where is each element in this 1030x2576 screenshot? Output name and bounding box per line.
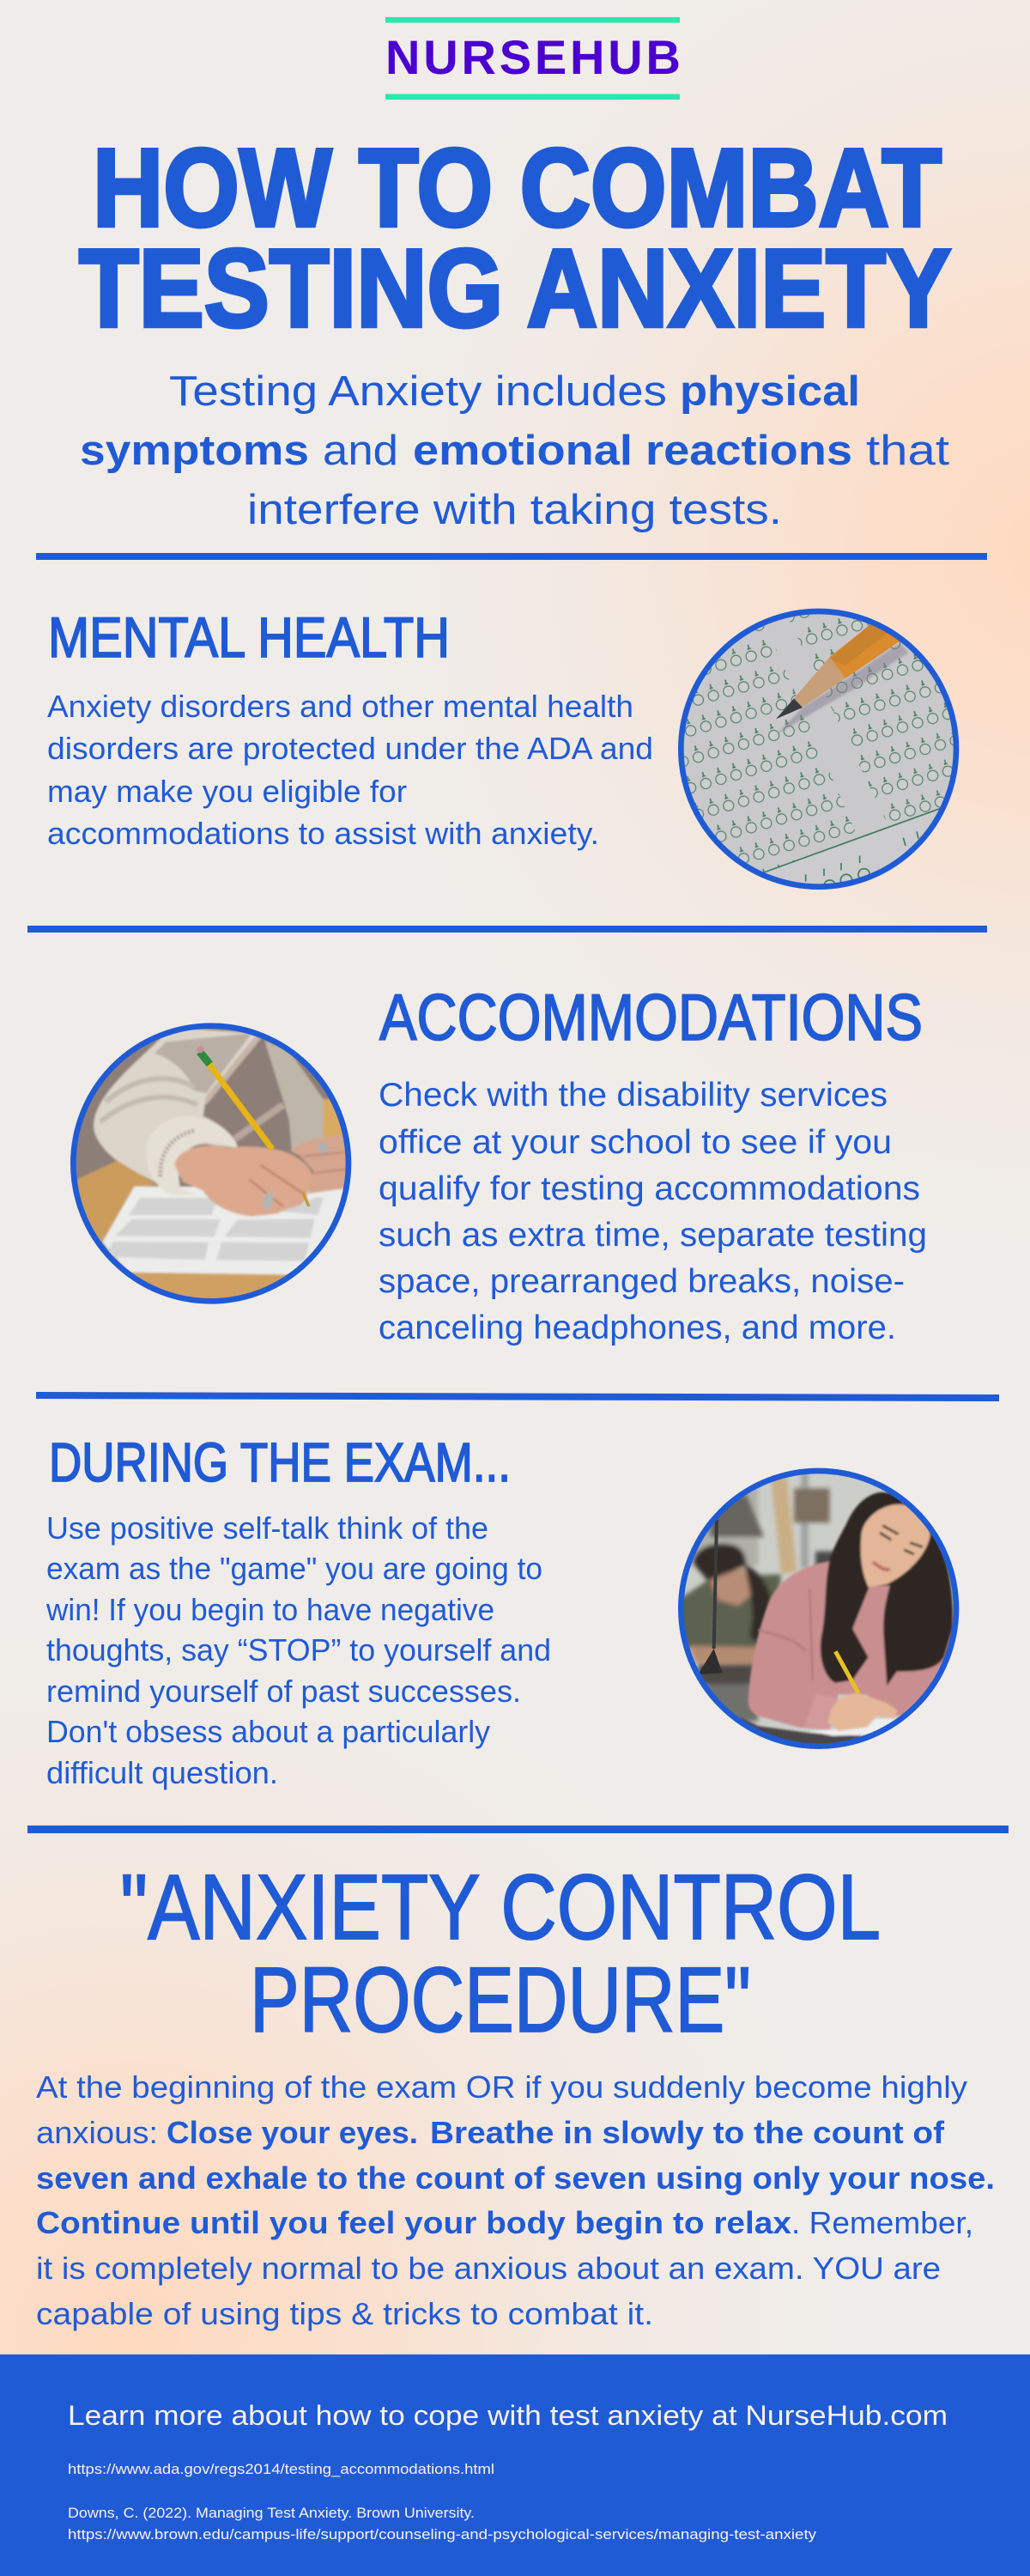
intro text: physical (680, 368, 860, 415)
heading: mental health: MENTAL HEALTH (48, 605, 450, 669)
text: mental health body: accommodations to assist with anxiety. (47, 816, 599, 851)
intro text: symptoms (80, 428, 309, 474)
text: accommodations body: office at your school to see if you (379, 1124, 892, 1161)
text: accommodations body: Check with the disability services (379, 1077, 888, 1114)
heading: accommodations: ACCOMMODATIONS (379, 981, 923, 1054)
heading: anxiety control procedure: "ANXIETY CONTROL (120, 1855, 881, 1959)
text: anxiety control procedure body: Breathe in slowly to the count of (430, 2115, 945, 2150)
intro text (80, 368, 949, 533)
text: mental health body: may make you eligible for (47, 774, 407, 809)
intro text: interfere with taking tests. (247, 487, 782, 533)
text: mental health body: Anxiety disorders and other mental health (47, 689, 633, 724)
logo: NurseHub (385, 17, 681, 100)
text: accommodations body (379, 1077, 927, 1346)
text: accommodations body: space, prearranged breaks, noise- (379, 1263, 905, 1300)
text: accommodations body: qualify for testing accommodations (379, 1170, 920, 1207)
photo frame (681, 1471, 956, 1747)
photo: students taking exam (676, 1466, 964, 1754)
intro text: emotional reactions (413, 428, 852, 474)
title: HOW TO COMBAT (93, 126, 942, 250)
footer call to action: Learn more about how to cope with test anxiety at NurseHub.com (68, 2400, 948, 2431)
text: accommodations body: canceling headphones, and more. (379, 1309, 896, 1346)
text: during the exam body: remind yourself of past successes. (46, 1674, 521, 1709)
heading: during the exam: DURING THE EXAM... (49, 1431, 511, 1493)
text: anxiety control procedure body: anxious: (36, 2115, 158, 2150)
text: mental health body (47, 689, 653, 851)
intro text: that (866, 428, 949, 474)
photo frame (681, 611, 956, 887)
panel: during the exam (45, 1431, 964, 1790)
intro text: and (323, 428, 398, 474)
intro text: Testing Anxiety includes (169, 368, 667, 415)
text: during the exam body: Don't obsess about a particularly (46, 1714, 490, 1749)
panel: mental health (47, 598, 978, 902)
footer references (68, 2461, 817, 2543)
text: during the exam body (45, 1510, 551, 1790)
text: during the exam body: exam as the "game" you are going to (46, 1551, 542, 1586)
text: anxiety control procedure body: . Remember, (791, 2205, 973, 2240)
text: anxiety control procedure body: seven and exhale to the count of seven using only your nose. (36, 2160, 995, 2196)
text: anxiety control procedure body (36, 2069, 995, 2331)
text: during the exam body: Use positive self-talk think of the (46, 1510, 488, 1546)
text: during the exam body: difficult question. (46, 1755, 278, 1790)
footer references: https://www.brown.edu/campus-life/support/counseling-and-psychological-services/managing-test-anxiety (68, 2526, 817, 2543)
text: during the exam body: thoughts, say “STOP” to yourself and (46, 1632, 551, 1668)
title (79, 126, 951, 350)
text: mental health body: disorders are protected under the ADA and (47, 731, 653, 766)
logo: NurseHub: NURSEHUB (385, 30, 681, 84)
text: anxiety control procedure body: capable of using tips & tricks to combat it. (36, 2296, 653, 2331)
text: anxiety control procedure body: Continue until you feel your body begin to relax (36, 2205, 792, 2240)
text: anxiety control procedure body: Close your eyes. (167, 2115, 418, 2150)
footer references: https://www.ada.gov/regs2014/testing_accommodations.html (68, 2461, 494, 2477)
text: anxiety control procedure body: At the beginning of the exam OR if you suddenly become highly (36, 2069, 968, 2105)
photo: answer sheet and pencil (678, 608, 960, 890)
text: accommodations body: such as extra time, separate testing (379, 1217, 927, 1254)
footer references: Downs, C. (2022). Managing Test Anxiety. Brown University. (68, 2505, 475, 2521)
photo frame (73, 1026, 348, 1301)
text: anxiety control procedure body: it is completely normal to be anxious about an exam. YOU are (36, 2251, 941, 2286)
heading: anxiety control procedure (120, 1855, 881, 2051)
heading: anxiety control procedure: PROCEDURE" (250, 1947, 751, 2051)
text: during the exam body: win! If you begin to have negative (45, 1592, 494, 1627)
footer band (0, 2354, 1030, 2576)
photo: student writing on test (66, 1019, 358, 1308)
panel: accommodations (66, 981, 927, 1346)
